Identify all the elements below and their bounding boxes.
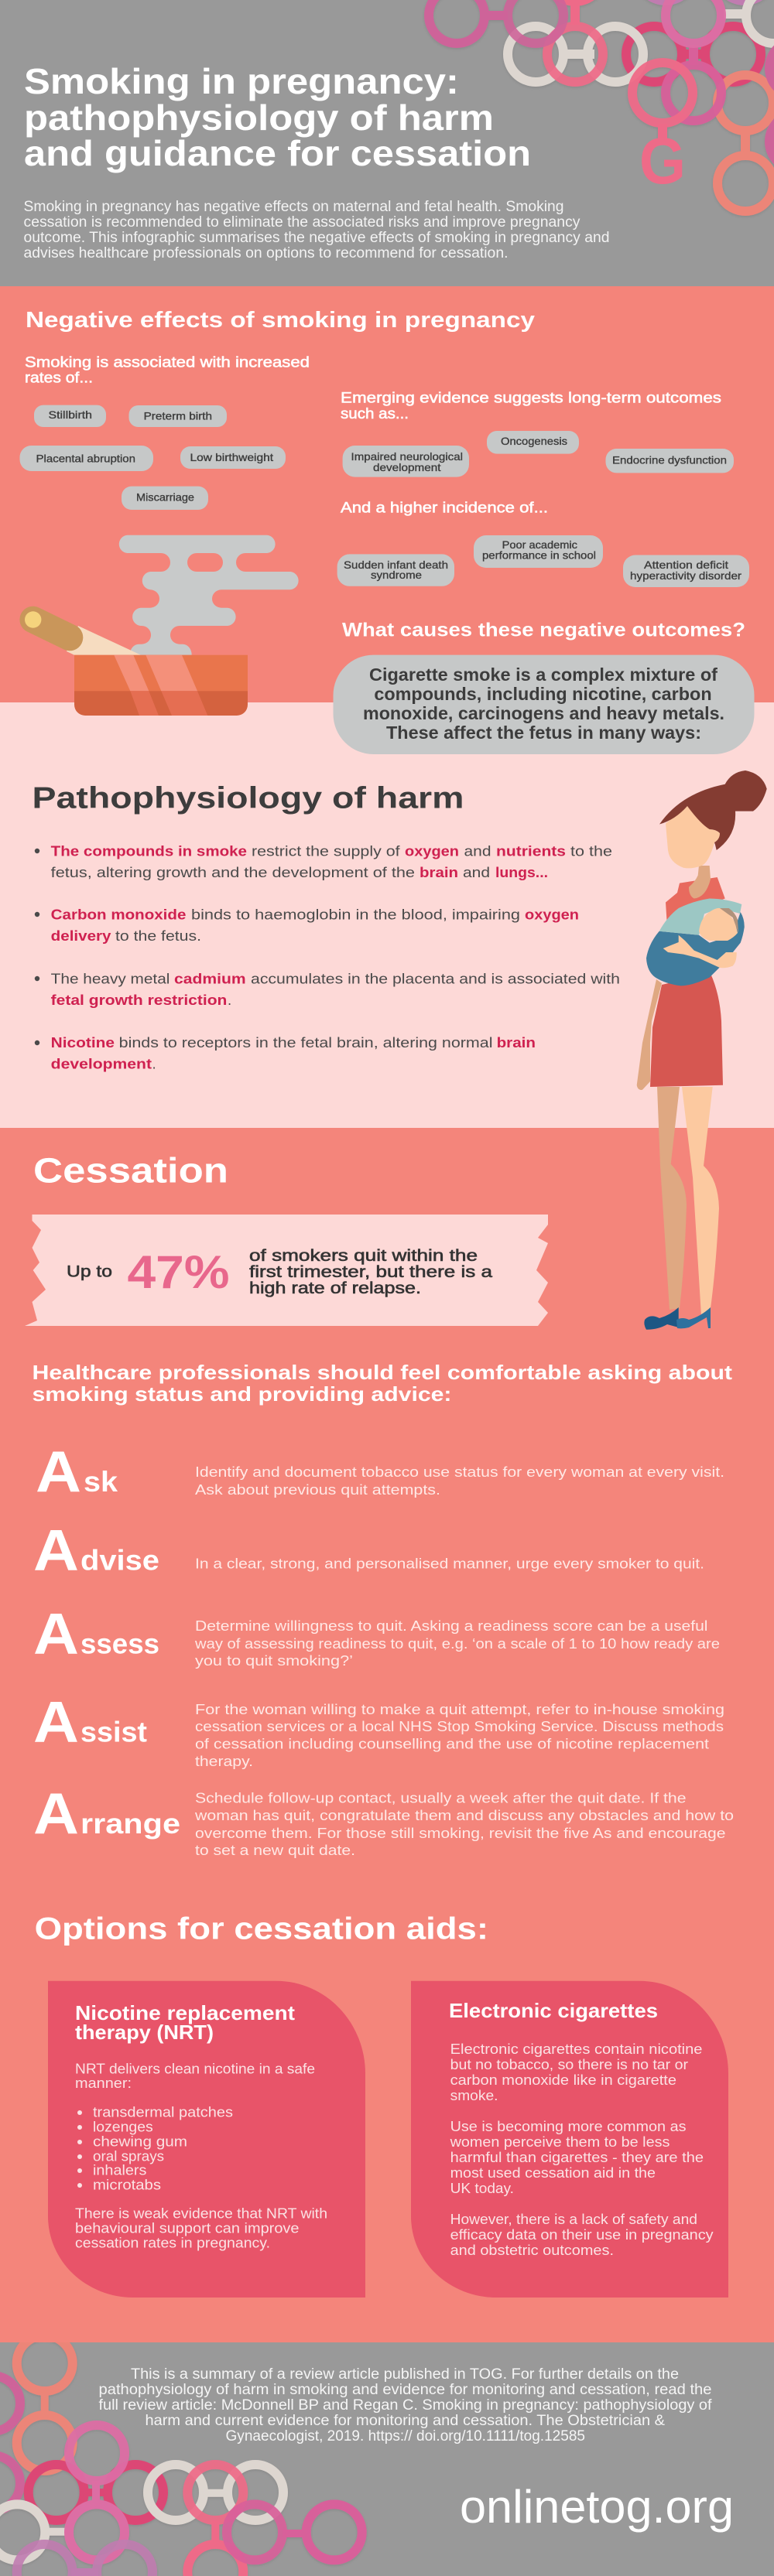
card: nicotine replacement therapy: therapy (NRT) [75, 2021, 214, 2044]
callout: cigarette smoke: compounds, including nicotine, carbon [374, 684, 712, 704]
pill group: long-term outcomes: Impaired neurological [351, 450, 463, 463]
bullet: compounds in smoke: lungs... [495, 864, 548, 880]
list: NRT products: oral sprays [93, 2148, 164, 2164]
step: assess: A [33, 1601, 79, 1666]
step: arrange: overcome them. For those still smoking, revisit the five As and encourage [195, 1825, 726, 1841]
callout: 47 percent banner [25, 1215, 548, 1326]
subheading: higher incidence: And a higher incidence of... [341, 500, 548, 516]
subheading: increased rates: rates of... [25, 371, 93, 387]
bullet: compounds in smoke: The compounds in smoke [51, 842, 247, 859]
title: and guidance for cessation [24, 133, 531, 173]
icon: ashtray [74, 655, 248, 716]
card: electronic cigarettes: Electronic cigarettes [449, 1999, 658, 2022]
heading: healthcare professionals: smoking status and providing advice: [33, 1382, 452, 1406]
bullet: cadmium: accumulates in the placenta and is associated with [251, 970, 620, 986]
intro text: advises healthcare professionals on options to recommend for cessation. [23, 245, 508, 261]
bullet: compounds in smoke: and [464, 842, 491, 859]
intro text: Smoking in pregnancy has negative effects on maternal and fetal health. Smoking [23, 199, 563, 215]
intro text: outcome. This infographic summarises the negative effects of smoking in pregnancy and [23, 230, 610, 246]
pill group: increased rates: Placental abruption [36, 453, 135, 465]
step: assess: way of assessing readiness to quit, e.g. ‘on a scale of 1 to 10 how ready are [194, 1635, 720, 1652]
step: arrange: Schedule follow-up contact, usually a week after the quit date. If the [195, 1790, 686, 1806]
step: assess [33, 1601, 720, 1669]
card: electronic cigarettes [411, 1981, 728, 2298]
subheading: emerging evidence: Emerging evidence suggests long-term outcomes [341, 390, 721, 407]
bullet: carbon monoxide [35, 907, 579, 944]
pill group: higher incidence: hyperactivity disorder [630, 569, 741, 582]
bullet: carbon monoxide: Carbon monoxide [51, 907, 186, 923]
panel: pathophysiology of harm [33, 782, 620, 1071]
heading: cessation: Cessation [33, 1150, 228, 1190]
title: pathophysiology of harm [24, 97, 494, 138]
list: NRT products: inhalers [93, 2163, 146, 2178]
step: assist: of cessation including counselling and the use of nicotine replacement [195, 1736, 709, 1752]
callout: cigarette smoke: monoxide, carcinogens and heavy metals. [363, 703, 724, 723]
step: arrange: rrange [80, 1808, 180, 1840]
step: advise [33, 1517, 704, 1582]
card: electronic cigarettes: Use is becoming more common as [450, 2119, 686, 2134]
callout: 47 percent banner: first trimester, but there is a [249, 1263, 492, 1281]
pill group: increased rates [20, 405, 286, 510]
step: advise: dvise [80, 1544, 159, 1576]
list: NRT products: microtabs [93, 2178, 161, 2193]
card: nicotine replacement therapy [48, 1981, 365, 2298]
icon: molecule rings top right [429, 0, 774, 211]
step: assist [33, 1689, 724, 1769]
panel: cessation [25, 1150, 734, 1858]
step: assess: ssess [80, 1628, 159, 1660]
callout: cigarette smoke: Cigarette smoke is a complex mixture of [369, 664, 717, 685]
icon: molecule rings bottom left [0, 2335, 362, 2576]
heading: negative effects: Negative effects of smoking in pregnancy [26, 308, 535, 333]
panel: negative effects background [0, 286, 774, 702]
card: electronic cigarettes: but no tobacco, so there is no tar or [450, 2057, 688, 2072]
step: advise: A [33, 1517, 79, 1582]
step: ask: Identify and document tobacco use status for every woman at every visit. [195, 1464, 724, 1480]
callout: cigarette smoke [333, 655, 754, 754]
card: nicotine replacement therapy: NRT delivers clean nicotine in a safe [75, 2062, 315, 2077]
pill group: increased rates: Preterm birth [144, 410, 212, 422]
subheading: emerging evidence: such as... [341, 406, 409, 422]
intro text [23, 199, 610, 261]
heading: pathophysiology: Pathophysiology of harm [33, 782, 464, 815]
list: NRT products: transdermal patches [93, 2105, 233, 2120]
subheading: increased rates [25, 355, 310, 387]
step: assess: Determine willingness to quit. Asking a readiness score can be a useful [195, 1618, 707, 1634]
bullet: carbon monoxide: delivery [51, 928, 111, 944]
step: ask: Ask about previous quit attempts. [195, 1481, 440, 1498]
subheading: emerging evidence [341, 390, 721, 422]
step: ask [36, 1439, 724, 1504]
bullet: nicotine: development [51, 1055, 152, 1071]
step: arrange: to set a new quit date. [195, 1842, 355, 1858]
card: electronic cigarettes: women perceive them to be less [450, 2134, 670, 2150]
step: assist: For the woman willing to make a quit attempt, refer to in-house smoking [195, 1701, 724, 1717]
step: ask: sk [84, 1466, 118, 1498]
callout: 47 percent banner: high rate of relapse. [249, 1279, 421, 1297]
step: assist: A [33, 1689, 79, 1754]
bullet: nicotine [35, 1034, 536, 1071]
list: NRT products: chewing gum [93, 2134, 187, 2149]
icon: woman holding baby [637, 770, 767, 1330]
callout: 47 percent banner: Up to [67, 1263, 112, 1281]
panel: pathophysiology background [0, 702, 774, 1128]
heading: what causes: What causes these negative outcomes? [342, 619, 745, 641]
bullet: cadmium: cadmium [174, 970, 246, 986]
text: citation: Gynaecologist, 2019. https:// doi.org/10.1111/tog.12585 [226, 2428, 585, 2444]
pill group: long-term outcomes: Endocrine dysfunction [612, 454, 727, 466]
pill group: higher incidence: Poor academic [502, 538, 577, 551]
step: arrange: woman has quit, congratulate them and discuss any obstacles and how to [194, 1807, 734, 1823]
pill group: higher incidence: Attention deficit [644, 559, 728, 571]
card: nicotine replacement therapy: cessation rates in pregnancy. [75, 2236, 270, 2251]
bullet: nicotine: . [152, 1055, 156, 1071]
pill group: higher incidence: syndrome [371, 569, 422, 581]
card: electronic cigarettes: and obstetric outcomes. [450, 2243, 614, 2258]
panel: cessation background [0, 1128, 774, 2342]
card: electronic cigarettes: However, there is a lack of safety and [450, 2212, 697, 2227]
heading: healthcare professionals: Healthcare professionals should feel comfortable asking about [33, 1361, 732, 1384]
title [24, 61, 531, 173]
panel: options for cessation aids [35, 1912, 728, 2298]
panel: negative effects [20, 308, 754, 754]
bullet: compounds in smoke [35, 842, 612, 880]
list: NRT products: lozenges [93, 2120, 153, 2135]
panel: footer [0, 2335, 774, 2576]
card: electronic cigarettes: harmful than cigarettes - they are the [450, 2150, 704, 2165]
pill group: higher incidence [337, 535, 749, 587]
step: arrange [33, 1781, 734, 1858]
text: citation: This is a summary of a review article published in TOG. For further details on the [131, 2366, 679, 2383]
bullet: compounds in smoke: to the [570, 842, 612, 859]
card: electronic cigarettes: most used cessation aid in the [450, 2165, 656, 2181]
callout: 47 percent banner: 47% [127, 1246, 229, 1298]
bullet: cadmium: . [228, 992, 231, 1008]
card: nicotine replacement therapy: behavioural support can improve [75, 2221, 299, 2236]
pill group: long-term outcomes: development [373, 461, 441, 473]
bullet: nicotine: binds to receptors in the fetal brain, altering normal [119, 1034, 492, 1051]
step: assist: therapy. [195, 1753, 253, 1769]
bullet: carbon monoxide: oxygen [525, 907, 579, 923]
text: citation: full review article: McDonnell BP and Regan C. Smoking in pregnancy: pathophysiology of [99, 2397, 712, 2414]
card: electronic cigarettes: smoke. [450, 2088, 498, 2103]
card: electronic cigarettes: Electronic cigarettes contain nicotine [450, 2041, 703, 2057]
card: nicotine replacement therapy: There is weak evidence that NRT with [75, 2206, 327, 2222]
bullet: cadmium [35, 970, 620, 1008]
subheading: increased rates: Smoking is associated with increased [25, 355, 310, 371]
text: citation: harm and current evidence for monitoring and cessation. The Obstetrician & [146, 2413, 665, 2429]
bullet: nicotine: brain [497, 1034, 536, 1051]
callout: cigarette smoke: These affect the fetus in many ways: [386, 723, 701, 743]
icon: cigarette [25, 611, 141, 655]
bullet: cadmium: fetal growth restriction [51, 992, 227, 1008]
list: NRT products [77, 2105, 233, 2193]
step: assist: ssist [80, 1716, 147, 1748]
pill group: long-term outcomes [343, 431, 734, 477]
bullet: compounds in smoke: oxygen [405, 842, 459, 859]
heading: options: Options for cessation aids: [35, 1912, 488, 1946]
card: electronic cigarettes: UK today. [450, 2181, 514, 2196]
bullet: compounds in smoke: fetus, altering growth and the development of the [51, 864, 415, 880]
text: website: onlinetog.org [460, 2481, 734, 2533]
bullet: cadmium: The heavy metal [51, 970, 170, 986]
text: citation [99, 2366, 712, 2444]
icon: smoke cloud [119, 535, 299, 655]
pill group: higher incidence: performance in school [482, 549, 596, 562]
card: electronic cigarettes: efficacy data on their use in pregnancy [450, 2227, 714, 2243]
icon: G letter of molecule: G [639, 125, 686, 197]
bullet: compounds in smoke: nutrients [496, 842, 566, 859]
bullet: nicotine: Nicotine [51, 1034, 115, 1051]
bullet: carbon monoxide: binds to haemoglobin in the blood, impairing [191, 907, 520, 923]
pill group: increased rates: Low birthweight [190, 451, 273, 463]
pill group: long-term outcomes: Oncogenesis [501, 435, 567, 447]
callout: 47 percent banner: of smokers quit within the [249, 1247, 478, 1265]
bullet: compounds in smoke: brain [420, 864, 458, 880]
card: electronic cigarettes: carbon monoxide like in cigarette [450, 2072, 676, 2088]
card: nicotine replacement therapy: manner: [75, 2075, 132, 2091]
step: arrange: A [33, 1781, 79, 1846]
card: nicotine replacement therapy: Nicotine replacement [75, 2001, 295, 2024]
pill group: increased rates: Miscarriage [136, 491, 194, 504]
heading: healthcare professionals [33, 1361, 732, 1406]
bullet: carbon monoxide: to the fetus. [115, 928, 201, 944]
bullet: compounds in smoke: restrict the supply of [252, 842, 401, 859]
intro text: cessation is recommended to eliminate the associated risks and improve pregnancy [23, 214, 580, 231]
title: Smoking in pregnancy: [24, 61, 459, 101]
text: citation: pathophysiology of harm in smoking and evidence for monitoring and cessation, read the [99, 2382, 712, 2398]
step: assist: cessation services or a local NHS Stop Smoking Service. Discuss methods [195, 1718, 724, 1734]
panel: header [0, 0, 774, 286]
step: advise: In a clear, strong, and personalised manner, urge every smoker to quit. [195, 1555, 704, 1572]
bullet: compounds in smoke: and [463, 864, 490, 880]
pill group: higher incidence: Sudden infant death [344, 559, 448, 571]
step: ask: A [36, 1439, 81, 1504]
step: assess: you to quit smoking?’ [195, 1652, 353, 1669]
pill group: increased rates: Stillbirth [48, 408, 92, 421]
